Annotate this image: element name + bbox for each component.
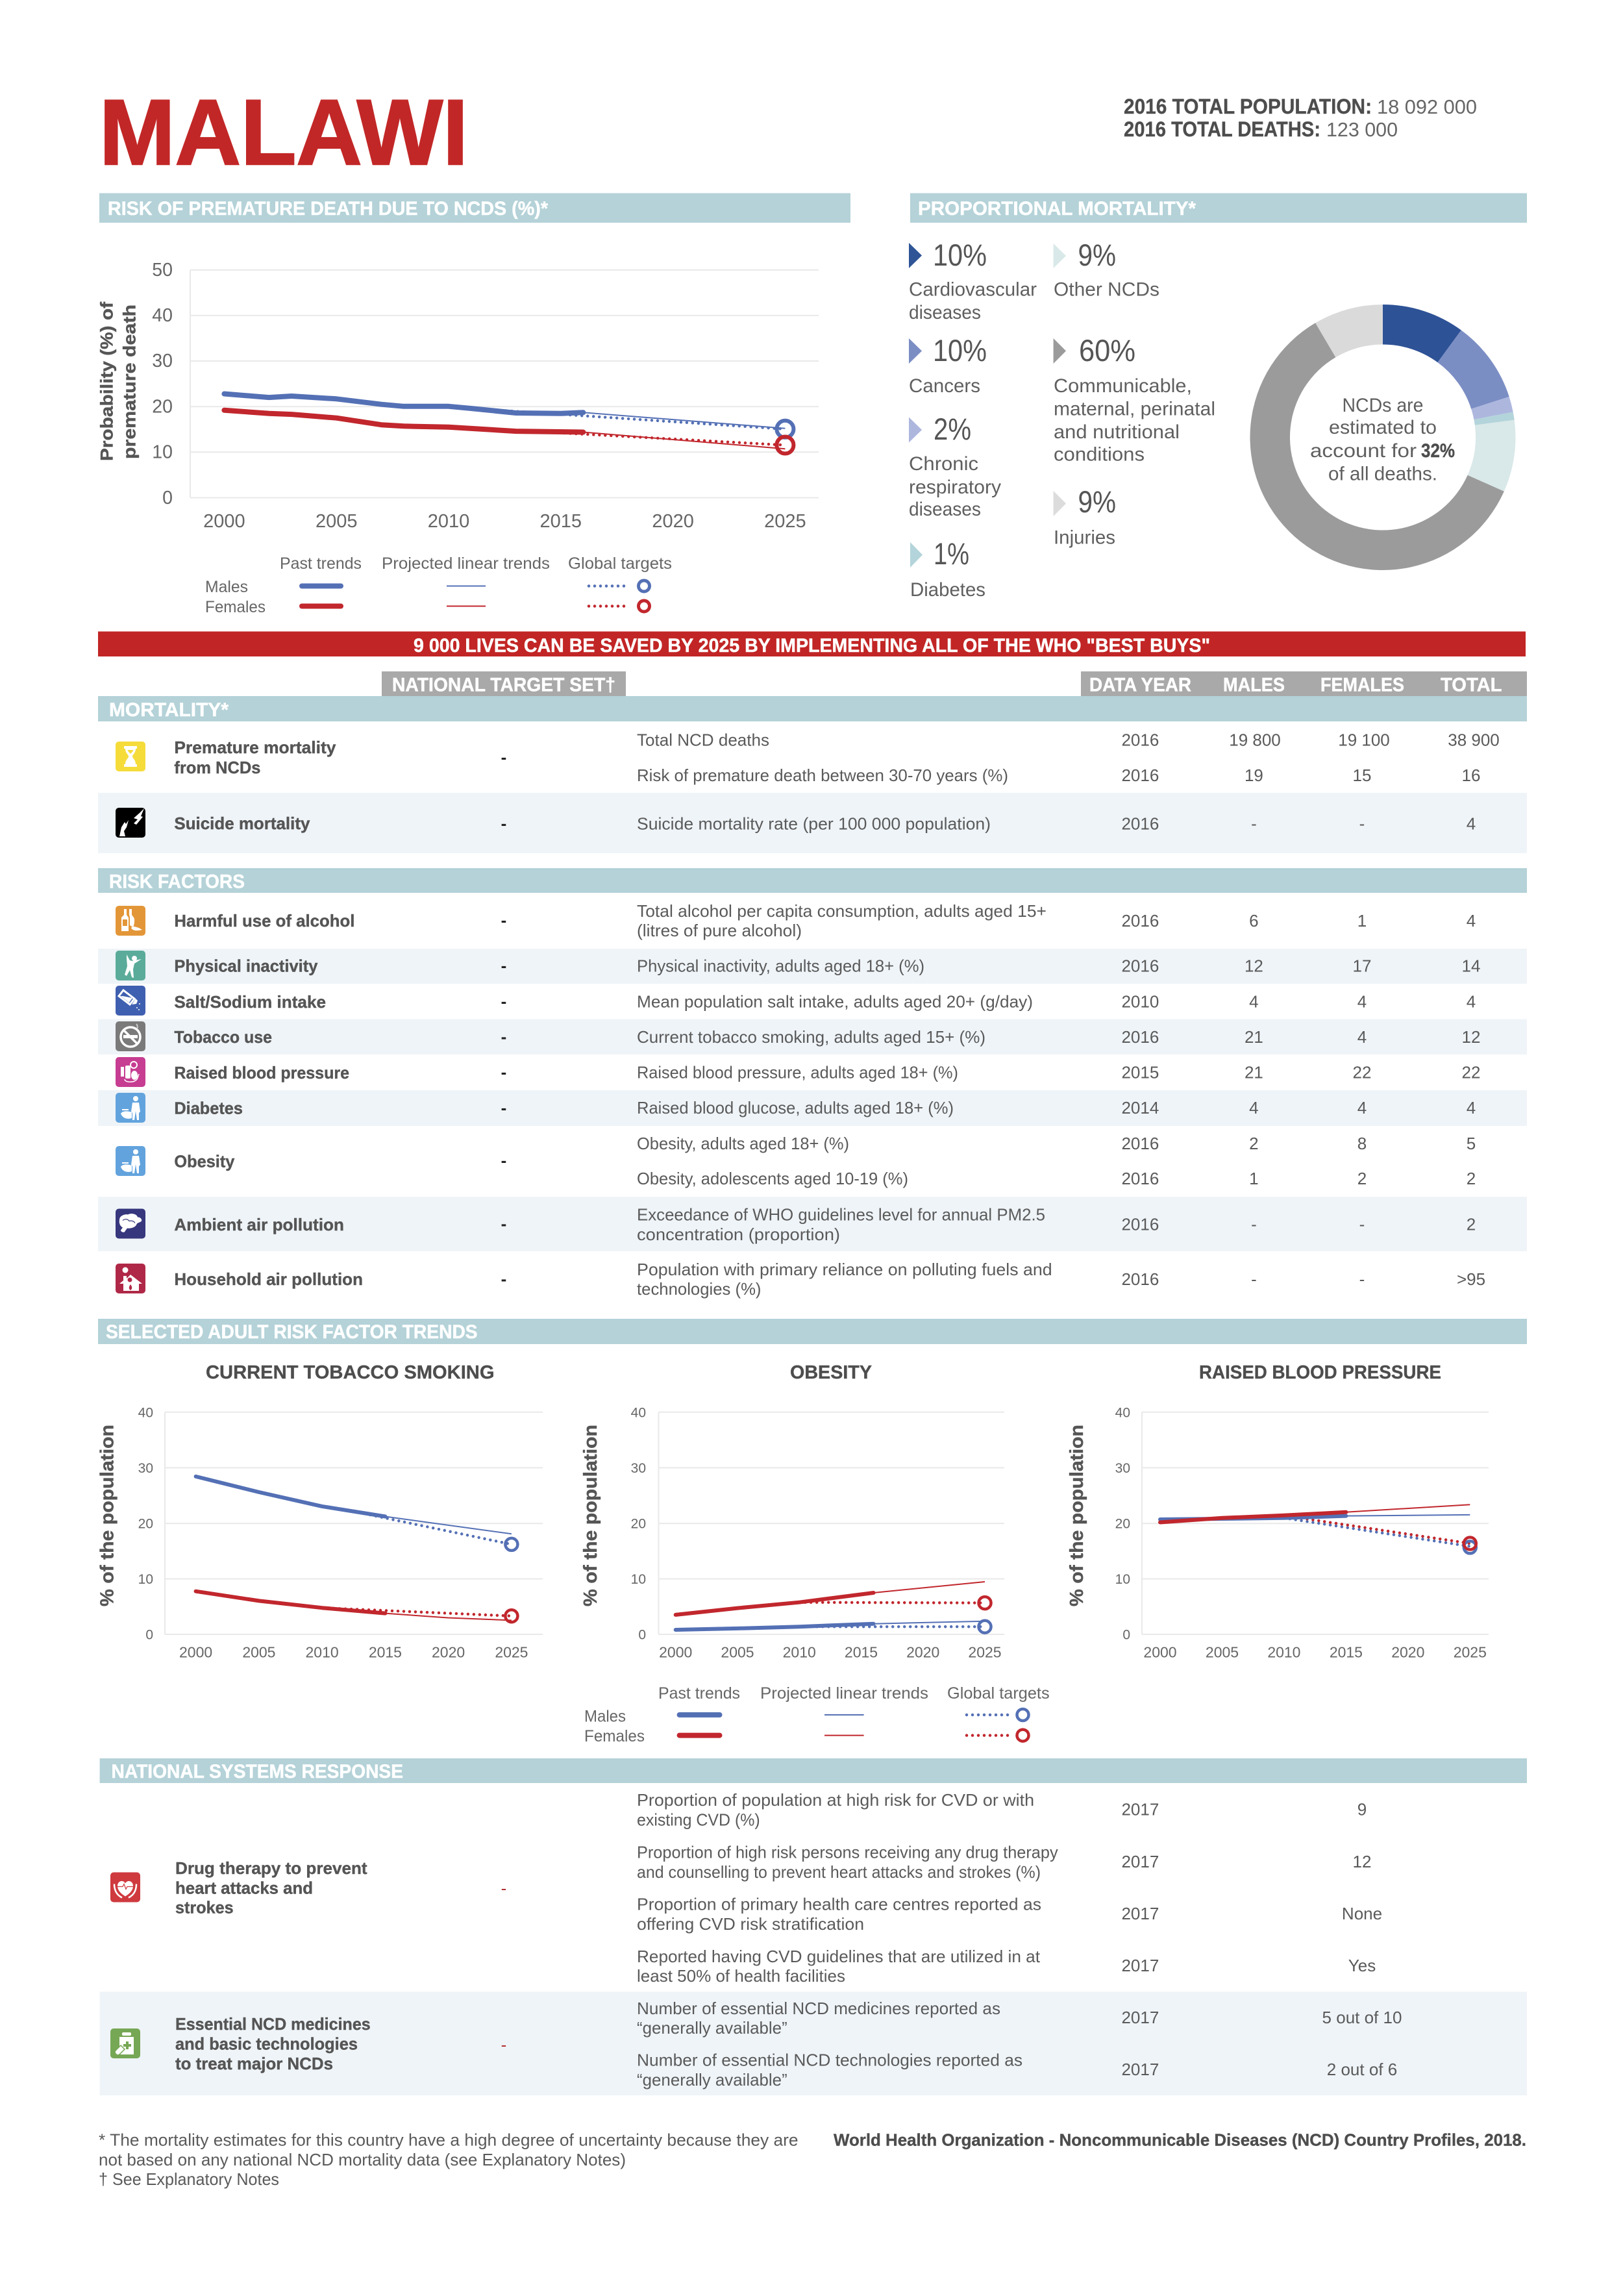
row: harmful use of alcohol <box>116 901 1476 940</box>
item: communicable conditions: conditions <box>1054 444 1145 466</box>
line chart: risk of premature death: 2015 <box>540 511 582 532</box>
row: essential NCD medicines: - <box>501 2035 506 2054</box>
column headings: data columns: TOTAL <box>1441 674 1502 696</box>
line chart: risk of premature death <box>97 260 819 532</box>
item: communicable conditions: and nutritional <box>1054 421 1180 443</box>
line chart: obesity: 2015 <box>845 1644 878 1661</box>
icon: salt shaker <box>116 986 145 1016</box>
row: ambient air pollution: concentration (proportion) <box>637 1225 840 1244</box>
row: diabetes: 2014 <box>1121 1098 1159 1117</box>
donut chart: proportional mortality: account for <box>1310 440 1417 462</box>
row: tobacco use: 2016 <box>1121 1027 1159 1047</box>
row: household air pollution: 2016 <box>1121 1269 1159 1289</box>
row: household air pollution <box>116 1260 1485 1299</box>
row: diabetes: 4 <box>1249 1098 1259 1117</box>
row: obesity: 2016 <box>1121 1169 1159 1188</box>
row: diabetes: 4 <box>1467 1098 1476 1117</box>
row: drug therapy: strokes <box>175 1897 234 1917</box>
row: obesity: 2016 <box>1121 1134 1159 1153</box>
row: drug therapy: Proportion of population at high risk for CVD or with <box>637 1790 1034 1810</box>
row: drug therapy: 2017 <box>1121 1852 1159 1871</box>
row: ambient air pollution: - <box>1359 1214 1365 1234</box>
line chart: obesity: 10 <box>631 1572 646 1587</box>
row: salt/sodium intake: 2010 <box>1121 992 1159 1012</box>
donut chart: proportional mortality: of all deaths. <box>1328 464 1437 484</box>
line chart: current tobacco smoking: 40 <box>138 1405 153 1420</box>
row: drug therapy: None <box>1342 1904 1382 1923</box>
line chart: raised blood pressure: 40 <box>1115 1405 1130 1420</box>
row: premature mortality from NCDs <box>116 730 1500 785</box>
row: salt/sodium intake: Salt/Sodium intake <box>174 992 326 1012</box>
line chart: current tobacco smoking: 10 <box>138 1572 153 1587</box>
row: drug therapy: Drug therapy to prevent <box>175 1858 367 1878</box>
row: premature mortality from NCDs: Total NCD deaths <box>637 730 769 750</box>
row: raised blood pressure: 2015 <box>1121 1062 1159 1082</box>
row: essential NCD medicines: 2017 <box>1121 2008 1159 2027</box>
column heading: national target set: NATIONAL TARGET SET† <box>392 674 615 696</box>
item: communicable conditions: maternal, perinatal <box>1054 399 1215 420</box>
row: harmful use of alcohol: Harmful use of alcohol <box>174 911 354 930</box>
header: population and deaths: 2016 TOTAL DEATHS: <box>1124 118 1320 141</box>
row: tobacco use: 4 <box>1357 1027 1367 1047</box>
icon: active person <box>116 951 145 980</box>
item: injuries <box>1054 484 1116 549</box>
item: diabetes: 1% <box>934 536 969 571</box>
icon: heart in hands <box>110 1873 140 1903</box>
row: tobacco use: Tobacco use <box>174 1027 272 1047</box>
line chart: current tobacco smoking: % of the population <box>97 1425 118 1606</box>
row: physical inactivity: 14 <box>1462 956 1480 976</box>
heading: mortality <box>98 696 1527 721</box>
row: suicide mortality: Suicide mortality <box>174 814 310 833</box>
line chart: risk of premature death: 20 <box>152 396 173 417</box>
heading: risk of premature death: RISK OF PREMATURE DEATH DUE TO NCDS (%)* <box>108 198 548 219</box>
line chart: obesity <box>580 1362 1004 1661</box>
row: obesity: - <box>501 1151 506 1170</box>
row: household air pollution: - <box>501 1269 506 1288</box>
row: suicide mortality: Suicide mortality rate (per 100 000 population) <box>637 814 991 834</box>
line chart: risk of premature death: 2025 <box>764 511 806 532</box>
row: obesity: Obesity <box>174 1152 235 1171</box>
row: household air pollution: - <box>1251 1269 1257 1289</box>
heading: risk of premature death <box>99 193 850 223</box>
row: tobacco use: 21 <box>1245 1027 1263 1047</box>
item: cardiovascular diseases: 10% <box>933 238 987 272</box>
row: diabetes: - <box>501 1098 506 1117</box>
row: raised blood pressure: 22 <box>1353 1062 1371 1082</box>
icon: no smoking <box>116 1021 145 1051</box>
item: injuries: 9% <box>1078 484 1116 519</box>
row: obesity: 2 <box>1467 1169 1476 1188</box>
line chart: obesity: 2020 <box>906 1644 939 1661</box>
row: tobacco use: 12 <box>1462 1027 1480 1047</box>
row: drug therapy: offering CVD risk stratification <box>637 1914 864 1934</box>
row: premature mortality from NCDs: - <box>501 747 506 767</box>
row: physical inactivity: Physical inactivity, adults aged 18+ (%) <box>637 956 924 976</box>
line chart: raised blood pressure: 0 <box>1122 1627 1130 1643</box>
item: other NCDs <box>1054 238 1159 300</box>
line chart: obesity: 2005 <box>721 1644 754 1661</box>
row: premature mortality from NCDs: 19 100 <box>1338 730 1390 750</box>
row: diabetes: Raised blood glucose, adults aged 18+ (%) <box>637 1098 954 1117</box>
footnotes: * The mortality estimates for this country have a high degree of uncertainty because they are <box>99 2130 799 2149</box>
row: ambient air pollution <box>98 1197 1527 1251</box>
line chart: obesity: 0 <box>638 1627 646 1643</box>
row: essential NCD medicines: 2017 <box>1121 2060 1159 2079</box>
line chart: current tobacco smoking: 20 <box>138 1517 153 1532</box>
line chart: raised blood pressure: 2020 <box>1391 1644 1424 1661</box>
line chart: obesity: % of the population <box>580 1425 601 1606</box>
row: obesity: 2 <box>1249 1134 1259 1153</box>
line chart: raised blood pressure: RAISED BLOOD PRESSURE <box>1199 1362 1441 1383</box>
header: population and deaths: 18 092 000 <box>1377 95 1477 118</box>
row: harmful use of alcohol: 2016 <box>1121 911 1159 930</box>
line chart: raised blood pressure: 10 <box>1115 1572 1130 1587</box>
line chart: obesity: 2010 <box>783 1644 816 1661</box>
footnotes: † See Explanatory Notes <box>99 2169 279 2189</box>
row: obesity: 5 <box>1467 1134 1476 1153</box>
icon: smoke cloud <box>116 1209 145 1239</box>
legend: risk factor trend charts: Projected linear trends <box>760 1684 928 1703</box>
row: physical inactivity: 17 <box>1353 956 1371 976</box>
legend: risk factor trend charts: Past trends <box>658 1684 740 1703</box>
row: premature mortality from NCDs: 16 <box>1462 766 1480 785</box>
row: drug therapy: least 50% of health facilities <box>637 1966 845 1986</box>
row: drug therapy: 9 <box>1357 1800 1367 1819</box>
line chart: raised blood pressure: 2000 <box>1143 1644 1177 1661</box>
icon: person and scale <box>116 1146 145 1176</box>
item: other NCDs: Other NCDs <box>1054 279 1159 300</box>
line chart: obesity: 40 <box>631 1405 646 1420</box>
item: diabetes <box>910 536 985 601</box>
line chart: raised blood pressure <box>1067 1362 1489 1661</box>
line chart: obesity: 20 <box>631 1517 646 1532</box>
row: raised blood pressure: 22 <box>1462 1062 1480 1082</box>
line chart: current tobacco smoking: 2000 <box>179 1644 212 1661</box>
line chart: current tobacco smoking: 0 <box>145 1627 153 1643</box>
row: harmful use of alcohol: (litres of pure alcohol) <box>637 921 802 940</box>
line chart: current tobacco smoking: 2015 <box>369 1644 402 1661</box>
line chart: risk of premature death: Probability (%) of <box>97 301 117 461</box>
row: premature mortality from NCDs: 2016 <box>1121 766 1159 785</box>
donut chart: proportional mortality: 32% <box>1421 440 1455 462</box>
legend: premature death chart <box>205 555 672 616</box>
row: premature mortality from NCDs: 19 <box>1245 766 1263 785</box>
row: essential NCD medicines: 5 out of 10 <box>1322 2008 1402 2027</box>
donut chart: proportional mortality: NCDs are <box>1343 395 1423 416</box>
icon: medicine bottle <box>110 2028 140 2058</box>
row: suicide mortality: 2016 <box>1121 814 1159 834</box>
icon: person and scale <box>116 1093 145 1123</box>
row: essential NCD medicines: “generally available” <box>637 2018 787 2038</box>
row: drug therapy: heart attacks and <box>175 1878 313 1897</box>
row: ambient air pollution: 2016 <box>1121 1214 1159 1234</box>
row: ambient air pollution: 2 <box>1467 1214 1476 1234</box>
heading: risk factors: RISK FACTORS <box>109 871 245 892</box>
row: essential NCD medicines: and basic technologies <box>175 2034 358 2054</box>
row: raised blood pressure: Raised blood pressure, adults aged 18+ (%) <box>637 1062 958 1082</box>
line chart: current tobacco smoking: CURRENT TOBACCO SMOKING <box>206 1362 495 1383</box>
line chart: raised blood pressure: % of the population <box>1067 1425 1087 1606</box>
row: diabetes: 4 <box>1357 1098 1367 1117</box>
row: physical inactivity: 2016 <box>1121 956 1159 976</box>
row: drug therapy: Proportion of primary health care centres reported as <box>637 1895 1041 1914</box>
row: ambient air pollution: Exceedance of WHO guidelines level for annual PM2.5 <box>637 1205 1045 1225</box>
icon: hourglass <box>116 742 145 771</box>
row: diabetes <box>98 1090 1527 1126</box>
row: salt/sodium intake: 4 <box>1249 992 1259 1012</box>
heading: mortality: MORTALITY* <box>109 699 229 721</box>
line chart: raised blood pressure: 20 <box>1115 1517 1130 1532</box>
row: premature mortality from NCDs: 38 900 <box>1448 730 1500 750</box>
line chart: risk of premature death: 0 <box>162 488 173 508</box>
legend: risk factor trend charts: Females <box>584 1727 645 1745</box>
footnotes: not based on any national NCD mortality data (see Explanatory Notes) <box>99 2150 626 2169</box>
row: essential NCD medicines: Number of essential NCD technologies reported as <box>637 2051 1022 2070</box>
row: premature mortality from NCDs: 19 800 <box>1229 730 1281 750</box>
row: drug therapy: - <box>501 1878 506 1898</box>
row: ambient air pollution: Ambient air pollution <box>174 1215 344 1234</box>
line chart: current tobacco smoking: 30 <box>138 1461 153 1476</box>
row: drug therapy: Proportion of high risk persons receiving any drug therapy <box>637 1843 1058 1862</box>
row: drug therapy: existing CVD (%) <box>637 1810 760 1830</box>
row: tobacco use <box>98 1019 1527 1054</box>
row: obesity: 8 <box>1357 1134 1367 1153</box>
row: drug therapy: Yes <box>1348 1956 1376 1975</box>
line chart: obesity: 2000 <box>659 1644 692 1661</box>
header: population and deaths <box>1124 95 1477 141</box>
heading: proportional mortality <box>910 193 1527 223</box>
line chart: current tobacco smoking <box>97 1362 543 1661</box>
heading: national systems response: NATIONAL SYSTEMS RESPONSE <box>112 1761 403 1782</box>
line chart: risk of premature death: 2010 <box>428 511 469 532</box>
line chart: current tobacco smoking: 2005 <box>242 1644 275 1661</box>
item: chronic respiratory diseases: 2% <box>934 412 971 446</box>
line chart: current tobacco smoking: 2020 <box>432 1644 465 1661</box>
row: physical inactivity: 12 <box>1245 956 1263 976</box>
banner: lives saved: 9 000 LIVES CAN BE SAVED BY 2025 BY IMPLEMENTING ALL OF THE WHO "BEST BUYS" <box>414 635 1210 656</box>
banner: lives saved <box>98 631 1526 656</box>
item: cancers: 10% <box>933 333 987 368</box>
line chart: current tobacco smoking: 2010 <box>306 1644 339 1661</box>
heading: selected adult risk factor trends <box>98 1319 1527 1344</box>
line chart: risk of premature death: 50 <box>152 260 173 281</box>
source credit: World Health Organization - Noncommunicable Diseases (NCD) Country Profiles, 2018. <box>834 2130 1526 2149</box>
line chart: raised blood pressure: 30 <box>1115 1461 1130 1476</box>
line chart: raised blood pressure: 2010 <box>1267 1644 1300 1661</box>
icon: smoking house <box>116 1264 145 1293</box>
row: harmful use of alcohol: 6 <box>1249 911 1259 930</box>
heading: proportional mortality: PROPORTIONAL MORTALITY* <box>918 198 1196 219</box>
column headings: data columns: FEMALES <box>1320 674 1404 696</box>
row: essential NCD medicines: Number of essential NCD medicines reported as <box>637 1999 1000 2018</box>
row: obesity: 1 <box>1249 1169 1259 1188</box>
row: ambient air pollution: - <box>1251 1214 1257 1234</box>
heading: national systems response <box>100 1758 1527 1783</box>
line chart: risk of premature death: 10 <box>152 442 173 462</box>
row: harmful use of alcohol: 4 <box>1467 911 1476 930</box>
legend: premature death chart: Projected linear trends <box>382 555 550 573</box>
row: essential NCD medicines: “generally available” <box>637 2070 787 2090</box>
item: cancers: Cancers <box>909 375 980 397</box>
item: cardiovascular diseases: Cardiovascular <box>909 279 1037 300</box>
item: other NCDs: 9% <box>1078 238 1116 272</box>
icon: reaching hands <box>116 808 145 838</box>
line chart: current tobacco smoking: 2025 <box>495 1644 528 1661</box>
icon: alcohol bottles <box>116 906 145 936</box>
row: physical inactivity: Physical inactivity <box>174 956 318 976</box>
line chart: risk of premature death: premature death <box>119 305 139 459</box>
title: MALAWI <box>99 81 468 184</box>
legend: risk factor trend charts: Global targets <box>947 1684 1050 1703</box>
row: physical inactivity <box>98 949 1527 984</box>
row: tobacco use: - <box>501 1027 506 1047</box>
line chart: risk of premature death: 2005 <box>316 511 357 532</box>
row: suicide mortality: - <box>1251 814 1257 834</box>
heading: risk factors <box>98 868 1527 893</box>
row: salt/sodium intake: 4 <box>1467 992 1476 1012</box>
item: cardiovascular diseases <box>909 238 1037 323</box>
row: drug therapy <box>110 1790 1382 1986</box>
row: drug therapy: 2017 <box>1121 1904 1159 1923</box>
legend: risk factor trend charts <box>584 1684 1050 1745</box>
legend: premature death chart: Males <box>205 578 248 596</box>
row: harmful use of alcohol: 1 <box>1357 911 1367 930</box>
row: suicide mortality: - <box>1359 814 1365 834</box>
column headings: data columns: DATA YEAR <box>1089 674 1191 696</box>
row: raised blood pressure: 21 <box>1245 1062 1263 1082</box>
item: communicable conditions <box>1054 333 1215 466</box>
row: suicide mortality <box>98 793 1527 853</box>
line chart: obesity: 30 <box>631 1461 646 1476</box>
legend: premature death chart: Females <box>205 598 266 616</box>
row: household air pollution: >95 <box>1457 1269 1485 1289</box>
row: premature mortality from NCDs: from NCDs <box>174 758 260 777</box>
item: communicable conditions: 60% <box>1079 333 1135 368</box>
row: tobacco use: Current tobacco smoking, adults aged 15+ (%) <box>637 1027 985 1047</box>
row: raised blood pressure: - <box>501 1062 506 1082</box>
row: essential NCD medicines: to treat major NCDs <box>175 2054 333 2073</box>
row: salt/sodium intake: - <box>501 992 506 1011</box>
row: essential NCD medicines: Essential NCD medicines <box>175 2014 371 2034</box>
line chart: risk of premature death: 2000 <box>203 511 245 532</box>
footnotes <box>99 2130 799 2189</box>
row: obesity <box>116 1134 1476 1188</box>
row: obesity: 2 <box>1357 1169 1367 1188</box>
legend: risk factor trend charts: Males <box>584 1708 626 1726</box>
line chart: obesity: OBESITY <box>790 1362 872 1383</box>
row: drug therapy: 2017 <box>1121 1956 1159 1975</box>
line chart: obesity: 2025 <box>968 1644 1002 1661</box>
column headings: data columns <box>1081 671 1527 696</box>
row: premature mortality from NCDs: Risk of premature death between 30-70 years (%) <box>637 766 1008 785</box>
item: chronic respiratory diseases: diseases <box>909 499 981 520</box>
row: raised blood pressure: Raised blood pressure <box>174 1063 349 1082</box>
row: drug therapy: 2017 <box>1121 1800 1159 1819</box>
row: drug therapy: Reported having CVD guidelines that are utilized in at <box>637 1947 1041 1966</box>
line chart: raised blood pressure: 2025 <box>1454 1644 1487 1661</box>
row: ambient air pollution: - <box>501 1214 506 1234</box>
row: premature mortality from NCDs: Premature mortality <box>174 738 336 757</box>
legend: premature death chart: Past trends <box>280 555 362 573</box>
row: physical inactivity: - <box>501 956 506 975</box>
row: salt/sodium intake <box>116 986 1476 1016</box>
row: drug therapy: and counselling to prevent heart attacks and strokes (%) <box>637 1862 1041 1882</box>
item: cancers <box>909 333 987 397</box>
row: diabetes: Diabetes <box>174 1099 243 1118</box>
line chart: raised blood pressure: 2005 <box>1206 1644 1239 1661</box>
header: population and deaths: 123 000 <box>1326 118 1398 141</box>
row: household air pollution: Population with primary reliance on polluting fuels and <box>637 1260 1052 1279</box>
line chart: raised blood pressure: 2015 <box>1330 1644 1363 1661</box>
item: communicable conditions: Communicable, <box>1054 375 1192 397</box>
row: household air pollution: technologies (%) <box>637 1279 761 1299</box>
line chart: risk of premature death: 40 <box>152 305 173 326</box>
row: suicide mortality: 4 <box>1467 814 1476 834</box>
row: obesity: Obesity, adolescents aged 10-19 (%) <box>637 1169 908 1188</box>
row: raised blood pressure <box>116 1057 1480 1087</box>
row: drug therapy: 12 <box>1353 1852 1371 1871</box>
row: harmful use of alcohol: - <box>501 910 506 930</box>
row: premature mortality from NCDs: 2016 <box>1121 730 1159 750</box>
item: chronic respiratory diseases: respiratory <box>909 477 1001 498</box>
item: injuries: Injuries <box>1054 527 1115 549</box>
row: salt/sodium intake: Mean population salt intake, adults aged 20+ (g/day) <box>637 992 1033 1012</box>
row: household air pollution: - <box>1359 1269 1365 1289</box>
row: household air pollution: Household air pollution <box>174 1269 363 1289</box>
heading: selected adult risk factor trends: SELECTED ADULT RISK FACTOR TRENDS <box>106 1321 478 1343</box>
row: salt/sodium intake: 4 <box>1357 992 1367 1012</box>
row: suicide mortality: - <box>501 814 506 833</box>
row: premature mortality from NCDs: 15 <box>1353 766 1371 785</box>
item: chronic respiratory diseases <box>909 412 1001 520</box>
icon: blood pressure cuff <box>116 1057 145 1087</box>
donut chart: proportional mortality: estimated to <box>1329 417 1437 438</box>
line chart: risk of premature death: 30 <box>152 351 173 371</box>
row: obesity: Obesity, adults aged 18+ (%) <box>637 1134 849 1153</box>
header: population and deaths: 2016 TOTAL POPULATION: <box>1124 95 1372 118</box>
row: harmful use of alcohol: Total alcohol per capita consumption, adults aged 15+ <box>637 901 1047 921</box>
line chart: risk of premature death: 2020 <box>652 511 694 532</box>
item: diabetes: Diabetes <box>910 579 985 601</box>
column headings: data columns: MALES <box>1223 674 1285 696</box>
item: cardiovascular diseases: diseases <box>909 302 981 323</box>
row: essential NCD medicines: 2 out of 6 <box>1327 2060 1397 2079</box>
item: chronic respiratory diseases: Chronic <box>909 453 978 475</box>
proportional mortality: legend items <box>909 238 1215 601</box>
legend: premature death chart: Global targets <box>568 555 672 573</box>
donut chart: proportional mortality <box>1250 305 1515 570</box>
row: essential NCD medicines <box>100 1991 1527 2095</box>
